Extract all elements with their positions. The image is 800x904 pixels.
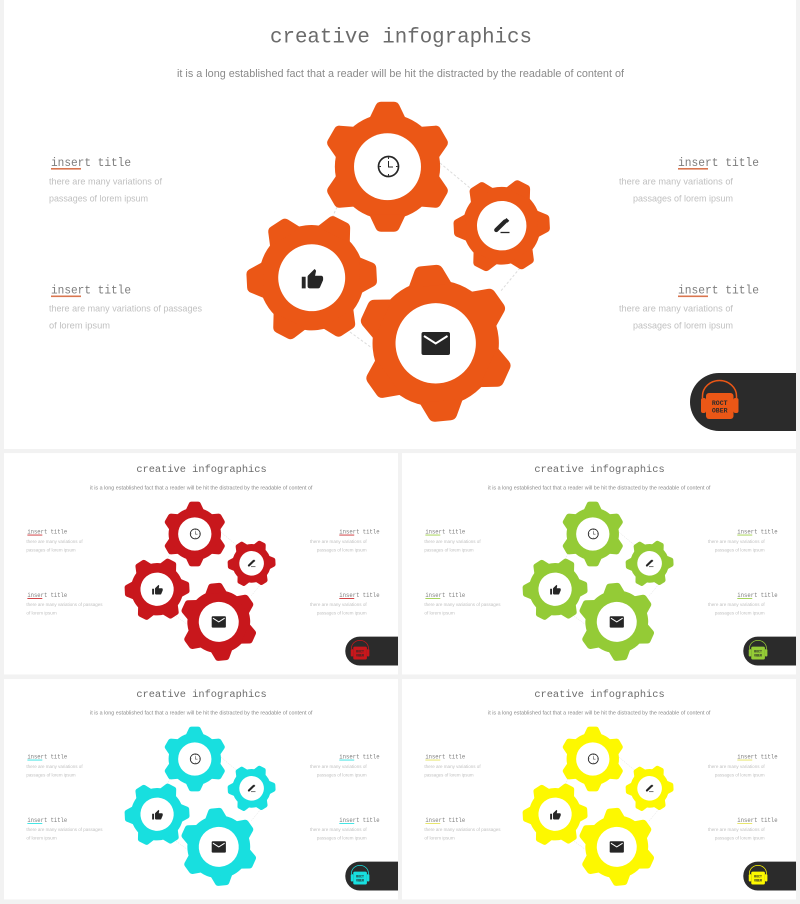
logo tag: ROCT [356,875,364,879]
text block: top right: insert title [339,754,380,761]
text block: bottom left: of lorem ipsum [26,610,57,616]
connector lines [565,757,659,849]
panel: orange infographic [4,0,796,449]
text block: bottom left: there are many variations of passages [26,827,103,833]
connector lines [167,532,261,624]
text block: top left: there are many variations of [26,764,83,770]
text block: bottom left [424,817,501,841]
text block: top right: passages of lorem ipsum [633,194,733,204]
text block: bottom left: of lorem ipsum [424,835,455,841]
connector lines [565,532,659,624]
logo tag: OBER [356,878,364,882]
text block: top right: passages of lorem ipsum [317,547,367,553]
text block: bottom right [310,817,380,841]
text block: top right: passages of lorem ipsum [317,772,367,778]
gear: thumbs up [511,771,599,858]
text block: bottom right: there are many variations of [619,304,733,314]
text block: bottom left: there are many variations of passages [424,602,501,608]
panel: red infographic [4,453,398,674]
gear: thumbs up [511,546,599,633]
text block: bottom right: passages of lorem ipsum [317,610,367,616]
connector lines [167,757,261,849]
text block: top left [424,754,481,778]
text block: top left: insert title [27,529,68,536]
text block: bottom right: insert title [737,592,778,599]
gear: mail [574,579,659,664]
text block: top right: insert title [678,156,759,170]
text block: bottom left: insert title [27,817,68,824]
gear: mail [176,804,261,889]
subtitle: it is a long established fact that a reader will be hit the distracted by the readable of content of [488,485,711,491]
logo tag: OBER [754,878,762,882]
text block: bottom left: there are many variations of passages [26,602,103,608]
text block: bottom left: insert title [51,284,131,298]
text block: bottom left: there are many variations of passages [424,827,501,833]
title: creative infographics [136,464,267,476]
text block: top left: insert title [425,754,466,761]
text block: bottom left: insert title [425,592,466,599]
logo tag: OBER [754,653,762,657]
text block: bottom right: insert title [678,284,759,298]
subtitle: it is a long established fact that a reader will be hit the distracted by the readable of content of [90,485,313,491]
text block: bottom left [424,592,501,616]
gear: thumbs up [224,190,399,365]
text block: top left: passages of lorem ipsum [49,194,148,204]
text block: top right [310,529,380,553]
text block: top right: there are many variations of [619,176,733,188]
title: creative infographics [534,689,665,701]
gear: clock [322,102,453,232]
text block: top left [49,156,162,204]
text block: top right: passages of lorem ipsum [715,547,765,553]
gear: thumbs up [113,546,201,633]
text block: bottom right: insert title [339,817,380,824]
gear: pencil [617,756,682,821]
text block: top left [26,754,83,778]
text block: bottom right: passages of lorem ipsum [633,320,733,332]
logo tag: OBER [712,408,728,414]
text block: bottom right: passages of lorem ipsum [317,835,367,841]
text block: bottom right: insert title [737,817,778,824]
text block: top right: insert title [339,529,380,536]
text block: bottom left: insert title [425,817,466,824]
gear: mail [350,258,521,428]
text block: top right: insert title [737,529,778,536]
gear: pencil [219,756,284,821]
text block: bottom right: passages of lorem ipsum [715,610,765,616]
text block: bottom left: there are many variations of passages [49,304,202,314]
subtitle: it is a long established fact that a reader will be hit the distracted by the readable of content of [177,68,625,80]
text block: bottom right: there are many variations of [310,827,367,833]
text block: top right: insert title [737,754,778,761]
gear: pencil [219,531,284,596]
gear: clock [560,727,625,791]
title: creative infographics [136,689,267,701]
text block: bottom left: of lorem ipsum [26,835,57,841]
panel: green infographic [402,453,796,674]
panel: yellow infographic [402,679,796,900]
text block: top right: there are many variations of [708,764,765,770]
gear: mail [574,804,659,889]
gear: mail [176,579,261,664]
logo tag [345,637,398,665]
text block: top left: passages of lorem ipsum [26,772,76,778]
text block: top left: there are many variations of [424,764,481,770]
text block: top left: there are many variations of [26,539,83,545]
text block: bottom right: there are many variations of [708,602,765,608]
text block: top left: insert title [51,156,131,170]
logo tag: ROCT [356,650,364,654]
text block: bottom left [49,284,202,332]
text block: top right [708,754,778,778]
gear: clock [162,727,227,791]
logo tag [345,862,398,890]
panel: cyan infographic [4,679,398,900]
gear: pencil [437,161,567,290]
subtitle: it is a long established fact that a reader will be hit the distracted by the readable of content of [488,710,711,716]
text block: top right: there are many variations of [708,539,765,545]
text block: top left: passages of lorem ipsum [424,547,474,553]
text block: bottom right [310,592,380,616]
text block: bottom left: of lorem ipsum [49,320,110,332]
title: creative infographics [534,464,665,476]
logo tag [690,373,796,431]
subtitle: it is a long established fact that a reader will be hit the distracted by the readable of content of [90,710,313,716]
text block: bottom right: passages of lorem ipsum [715,835,765,841]
gear: clock [162,502,227,566]
logo tag: ROCT [754,875,762,879]
text block: top right [310,754,380,778]
text block: bottom right: there are many variations of [708,827,765,833]
logo tag [743,637,796,665]
connector lines [332,163,520,348]
text block: bottom left [26,817,103,841]
logo tag: ROCT [712,400,728,407]
text block: bottom right [619,284,759,332]
text block: top left: insert title [27,754,68,761]
text block: top right: passages of lorem ipsum [715,772,765,778]
gear: pencil [617,531,682,596]
text block: bottom right [708,592,778,616]
title: creative infographics [270,26,532,50]
text block: top right: there are many variations of [310,539,367,545]
gear: clock [560,502,625,566]
gear: thumbs up [113,771,201,858]
logo tag [743,862,796,890]
text block: top left: there are many variations of [424,539,481,545]
text block: bottom right [708,817,778,841]
text block: bottom left: of lorem ipsum [424,610,455,616]
text block: top left: there are many variations of [49,176,162,188]
text block: top right [619,156,759,204]
logo tag: ROCT [754,650,762,654]
text block: top left: passages of lorem ipsum [26,547,76,553]
text block: top right: there are many variations of [310,764,367,770]
text block: top left: passages of lorem ipsum [424,772,474,778]
text block: bottom right: insert title [339,592,380,599]
logo tag: OBER [356,653,364,657]
text block: top left [26,529,83,553]
text block: top right [708,529,778,553]
text block: top left: insert title [425,529,466,536]
text block: top left [424,529,481,553]
text block: bottom left: insert title [27,592,68,599]
text block: bottom left [26,592,103,616]
text block: bottom right: there are many variations of [310,602,367,608]
